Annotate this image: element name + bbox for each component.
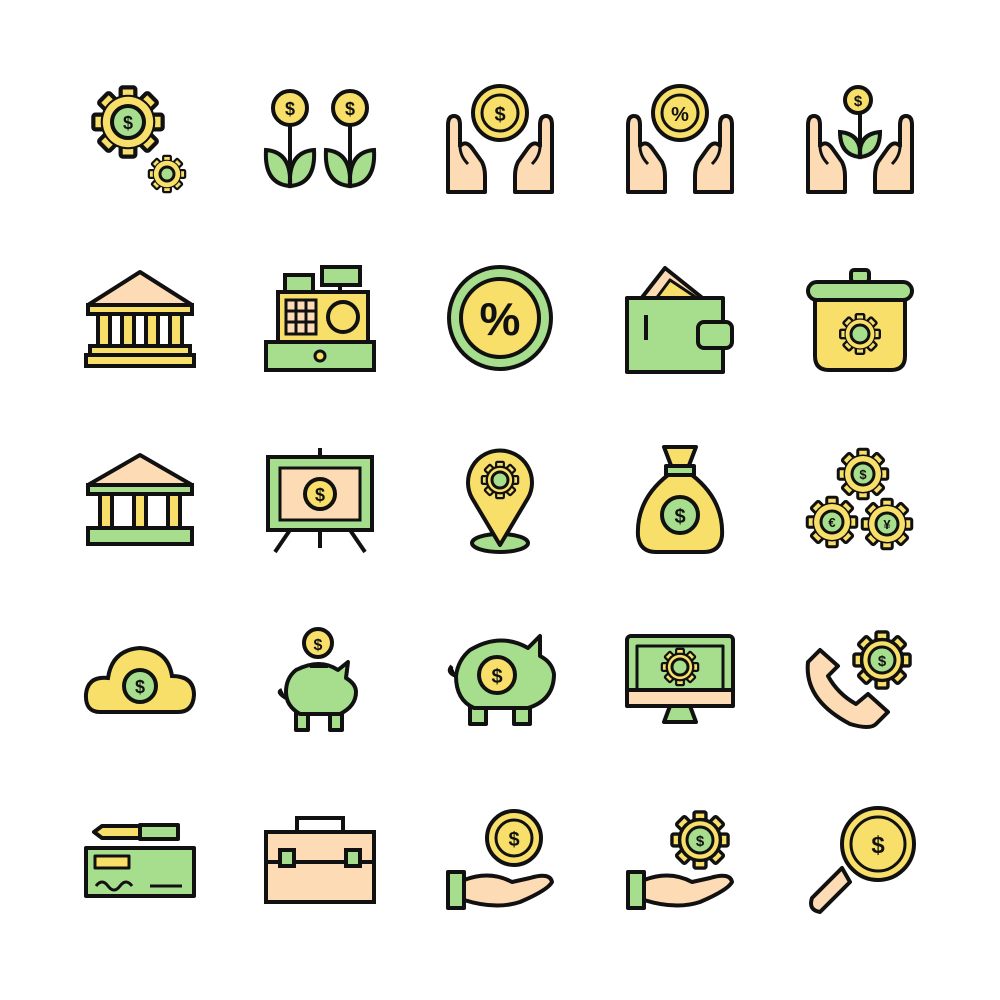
icon: currency gears (807, 449, 912, 549)
icon: cash register (266, 267, 374, 370)
icon: hand with gear (628, 812, 732, 908)
icon: money bag: $ (674, 506, 686, 528)
icon: phone with gear: $ (878, 653, 887, 670)
icon: percent circle: % (480, 293, 520, 345)
icon: money plants: $ (285, 99, 295, 119)
icon: hands with coin: $ (494, 104, 506, 126)
icon: monitor with gear (627, 636, 733, 722)
icon: cloud coin (86, 648, 194, 712)
icon: wallet (627, 268, 732, 372)
icon: phone with gear (808, 632, 910, 727)
icon: big piggy bank: $ (491, 666, 503, 688)
icon: currency gears: € (828, 515, 836, 530)
icon: gears with dollar (93, 87, 185, 192)
icon: hands with plant: $ (854, 93, 863, 110)
icon: piggy bank with coin (280, 629, 356, 730)
icon: money bag (638, 447, 722, 552)
icon: bank green (88, 455, 192, 544)
icon: hands with plant (808, 87, 912, 192)
icon: hand with gear: $ (696, 833, 705, 850)
icon: pot with gear (808, 270, 912, 370)
icon: percent circle (449, 267, 551, 369)
icon: big piggy bank (450, 636, 554, 724)
icon: easel: $ (315, 485, 325, 505)
icon: currency gears: $ (859, 467, 867, 482)
icon: magnifier with coin: $ (871, 832, 885, 859)
icon: hand with coin: $ (508, 829, 520, 851)
icon: cloud coin: $ (135, 677, 145, 697)
icon: currency gears: ¥ (883, 517, 891, 532)
icon: bank yellow (86, 272, 194, 366)
icon: briefcase (266, 818, 374, 902)
icon: easel (268, 448, 372, 552)
icon: money plants: $ (345, 99, 355, 119)
icon: hand with coin (448, 811, 552, 908)
icon: cheque with pen (86, 825, 194, 896)
icon: location pin with gear (468, 451, 532, 552)
icon: hands with percent coin: % (671, 104, 689, 126)
icon: hands with coin (448, 86, 552, 192)
icon: magnifier with coin (811, 808, 914, 912)
icon: hands with percent coin (628, 86, 732, 192)
icon: gears with dollar: $ (123, 113, 133, 133)
icon: money plants (266, 91, 374, 186)
icon: piggy bank with coin: $ (314, 637, 323, 654)
